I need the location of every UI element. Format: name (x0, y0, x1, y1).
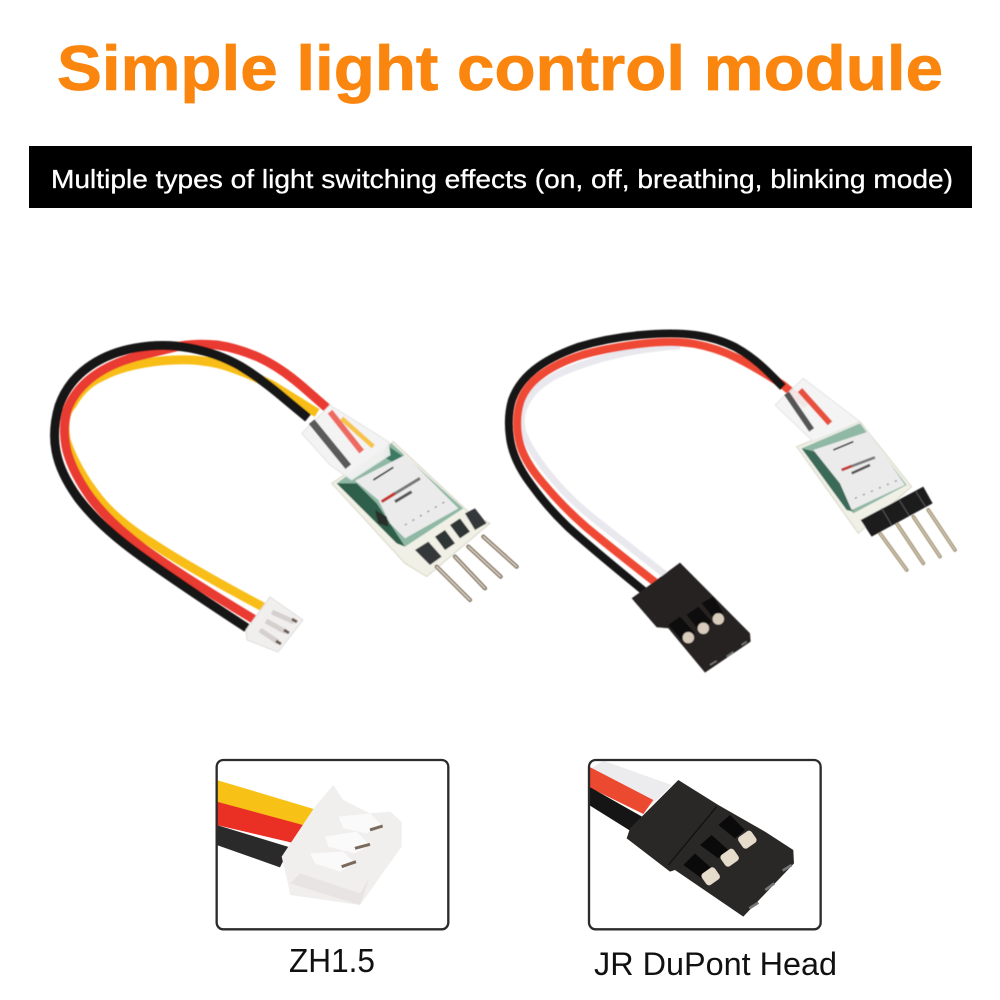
pins (437, 537, 517, 600)
JR plug (632, 563, 751, 673)
product: module with JR plug (509, 334, 955, 673)
header blocks (415, 542, 442, 565)
label: JR DuPont Head: JR DuPont Head (594, 946, 837, 982)
pins (880, 510, 955, 570)
inset: JR DuPont connector (589, 760, 821, 929)
label: ZH1.5: ZH1.5 (289, 942, 375, 979)
wires: yellow, red, black (55, 344, 327, 628)
ZH1.5 plug (246, 597, 303, 652)
title: Simple light control module (57, 34, 943, 104)
inset: ZH1.5 connector (217, 760, 448, 929)
module board (797, 422, 912, 533)
product: module with ZH1.5 plug (55, 344, 517, 652)
module board (302, 405, 517, 600)
subtitle banner (29, 146, 972, 208)
header (861, 487, 933, 537)
wires: white, red, black (509, 334, 807, 600)
subtitle banner: Multiple types of light switching effects (on, off, breathing, blinking mode) (51, 164, 953, 194)
